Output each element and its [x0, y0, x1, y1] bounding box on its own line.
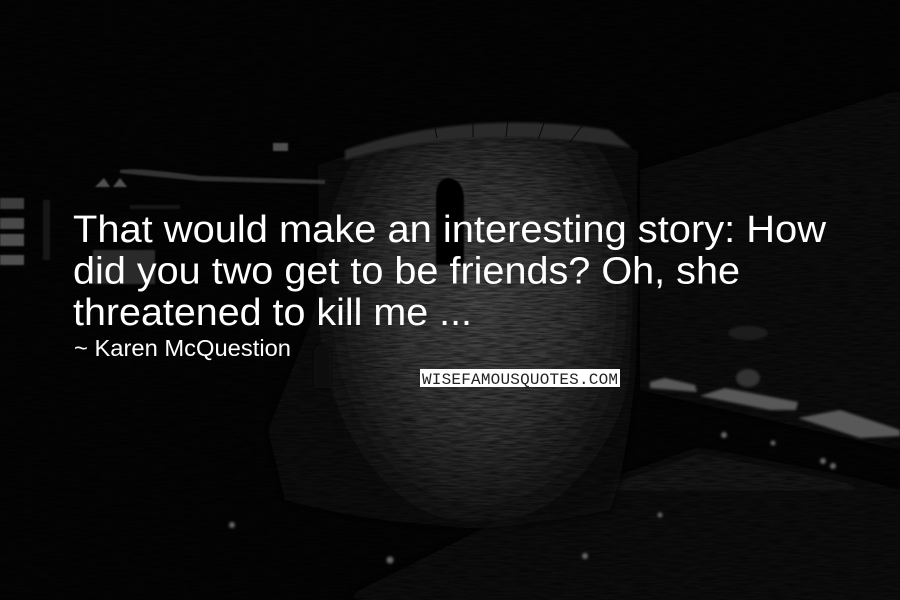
background: floor glow	[340, 450, 900, 600]
quote text: threatened to kill me ...	[73, 292, 472, 334]
floor light reflections	[229, 432, 836, 564]
background: right wall	[640, 90, 900, 450]
quote text	[73, 209, 827, 334]
tower cornice	[345, 122, 632, 160]
right display cases	[650, 326, 900, 438]
cornice joints	[435, 120, 582, 142]
author attribution: ~ Karen McQuestion	[74, 335, 291, 361]
left structure	[43, 178, 180, 284]
tower arched window	[436, 178, 464, 265]
quote text: That would make an interesting story: How	[73, 209, 827, 251]
small sign	[273, 143, 288, 151]
background: brick tower	[268, 134, 638, 525]
left window bars	[0, 198, 24, 265]
small lower window	[314, 344, 331, 388]
watermark badge: WISEFAMOUSQUOTES.COM	[422, 371, 618, 389]
quote text: did you two get to be friends? Oh, she	[73, 250, 740, 292]
left ledge beam	[120, 169, 325, 184]
